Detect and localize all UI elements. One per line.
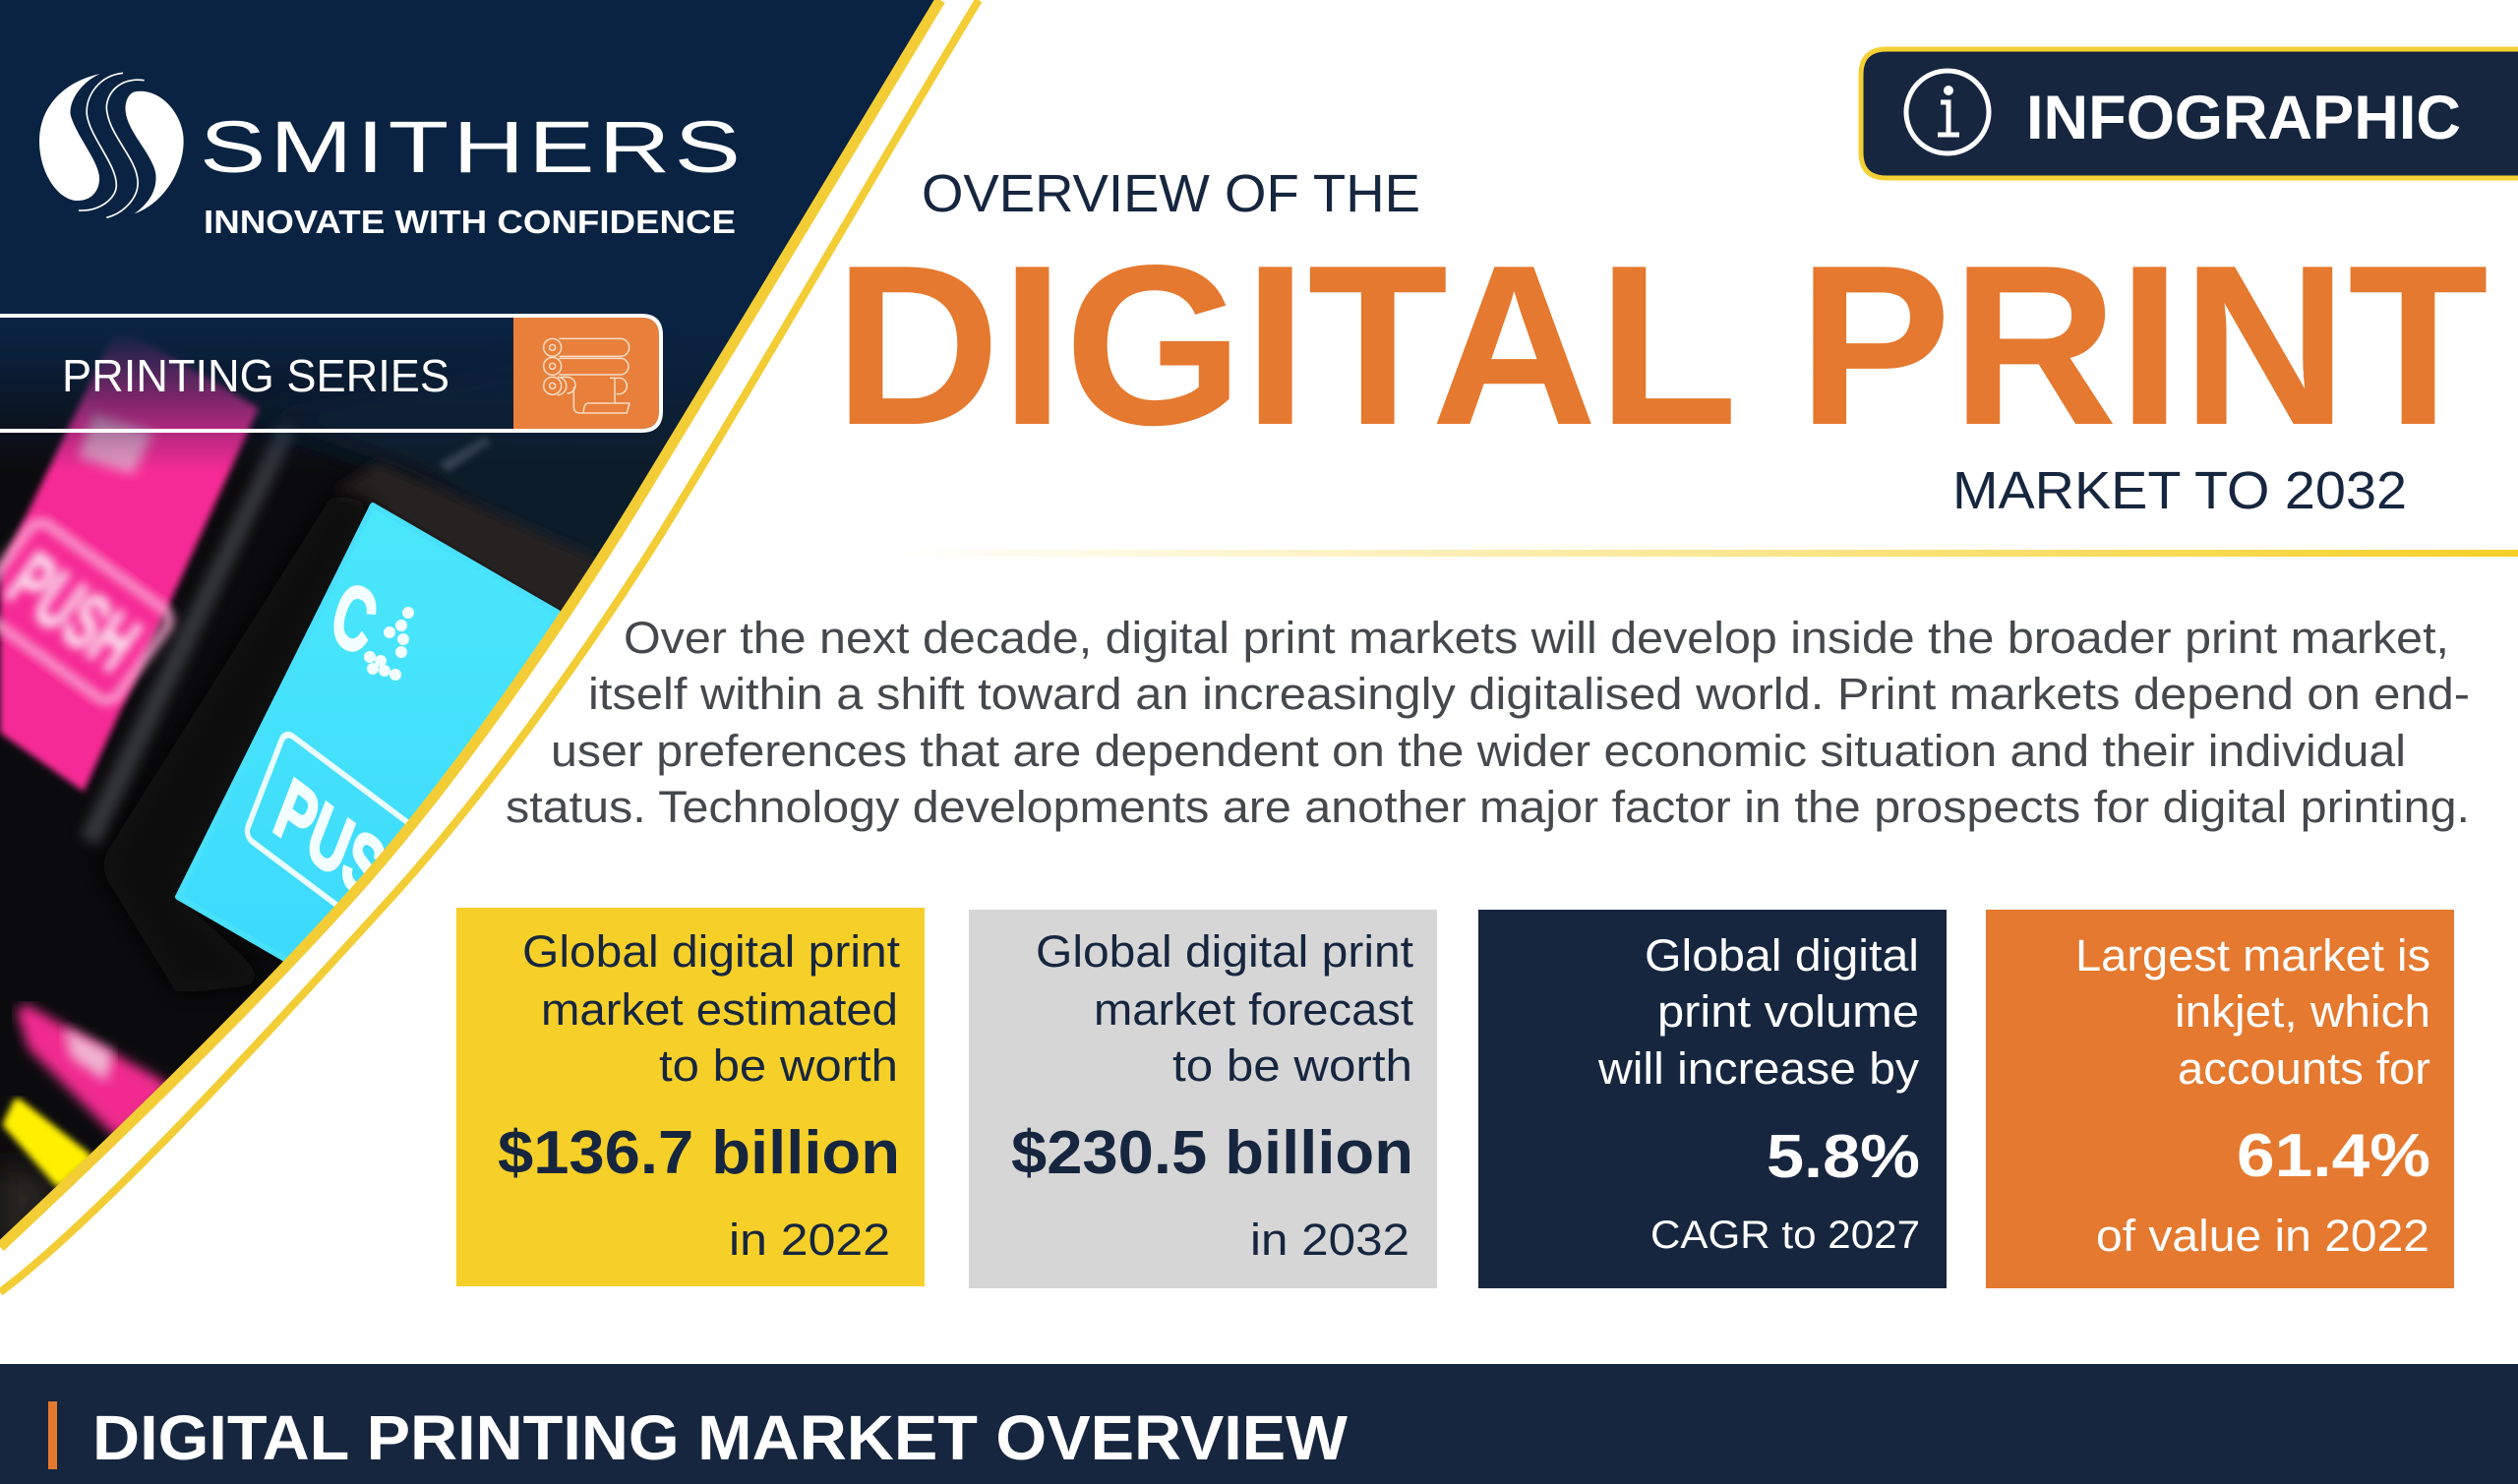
section bar: digital printing market overview: [0, 1364, 2518, 1484]
panel: header photo of ink cartridges: C: [321, 561, 388, 675]
panel: market value 2022: [456, 908, 925, 1286]
icon: print rollers: [544, 338, 630, 413]
section heading: DIGITAL PRINTING MARKET OVERVIEW: [92, 1402, 1349, 1473]
panel: volume growth: 5.8%: [1767, 1123, 1920, 1191]
icon: Smithers swirl: [39, 73, 184, 217]
panel: market value 2022: Global digital print: [522, 926, 901, 977]
tagline: INNOVATE WITH CONFIDENCE: [204, 204, 736, 240]
panel: market value 2022: $136.7 billion: [498, 1119, 900, 1187]
text block: introduction: status. Technology developments are another major factor in the prospects for digital printing.: [506, 782, 2470, 832]
panel: inkjet share: [1986, 910, 2454, 1288]
title: digital print: DIGITAL PRINT: [834, 218, 2488, 473]
heading: market to 2032: MARKET TO 2032: [1952, 461, 2407, 520]
panel: inkjet share: Largest market is: [2075, 930, 2430, 980]
text block: introduction: [506, 613, 2470, 832]
panel: market value 2022: in 2022: [729, 1215, 890, 1265]
panel: volume growth: will increase by: [1597, 1043, 1920, 1094]
badge: infographic: [1861, 49, 2518, 178]
text block: introduction: itself within a shift toward an increasingly digitalised world. Print markets depend on end-: [588, 669, 2470, 719]
panel: market forecast 2032: in 2032: [1250, 1215, 1409, 1265]
icon: info circle: [1906, 71, 1989, 153]
text block: introduction: user preferences that are dependent on the wider economic situation and their individual: [551, 726, 2406, 776]
panel: market value 2022: market estimated: [541, 984, 898, 1035]
white curved band with yellow lines: [0, 0, 979, 1292]
panel: inkjet share: inkjet, which: [2175, 986, 2430, 1037]
heading: overview of the: OVERVIEW OF THE: [922, 164, 1420, 223]
panel: header photo of ink cartridges: [0, 0, 984, 1278]
panel: inkjet share: of value in 2022: [2096, 1211, 2429, 1261]
panel: market forecast 2032: to be worth: [1172, 1040, 1412, 1091]
panel: volume growth: print volume: [1657, 986, 1919, 1037]
panel: header photo of ink cartridges: PUSH: [265, 759, 431, 946]
banner label: PRINTING SERIES: [62, 350, 450, 401]
panel: market forecast 2032: $230.5 billion: [1011, 1119, 1413, 1187]
logo: Smithers: [39, 73, 745, 240]
panel: inkjet share: accounts for: [2178, 1043, 2430, 1094]
text block: introduction: Over the next decade, digital print markets will develop inside the broader print market,: [624, 613, 2449, 663]
badge label: INFOGRAPHIC: [2026, 84, 2461, 152]
wordmark: SMITHERS: [200, 106, 745, 188]
panel: volume growth: Global digital: [1645, 930, 1919, 980]
panel: volume growth: CAGR to 2027: [1650, 1214, 1920, 1257]
panel: market forecast 2032: market forecast: [1094, 984, 1414, 1035]
panel: market forecast 2032: Global digital print: [1036, 926, 1414, 977]
panel: market value 2022: to be worth: [659, 1040, 898, 1091]
panel: printing series banner: [0, 316, 661, 431]
panel: market forecast 2032: [969, 910, 1437, 1288]
panel: volume growth: [1478, 910, 1947, 1288]
panel: inkjet share: 61.4%: [2237, 1122, 2430, 1190]
